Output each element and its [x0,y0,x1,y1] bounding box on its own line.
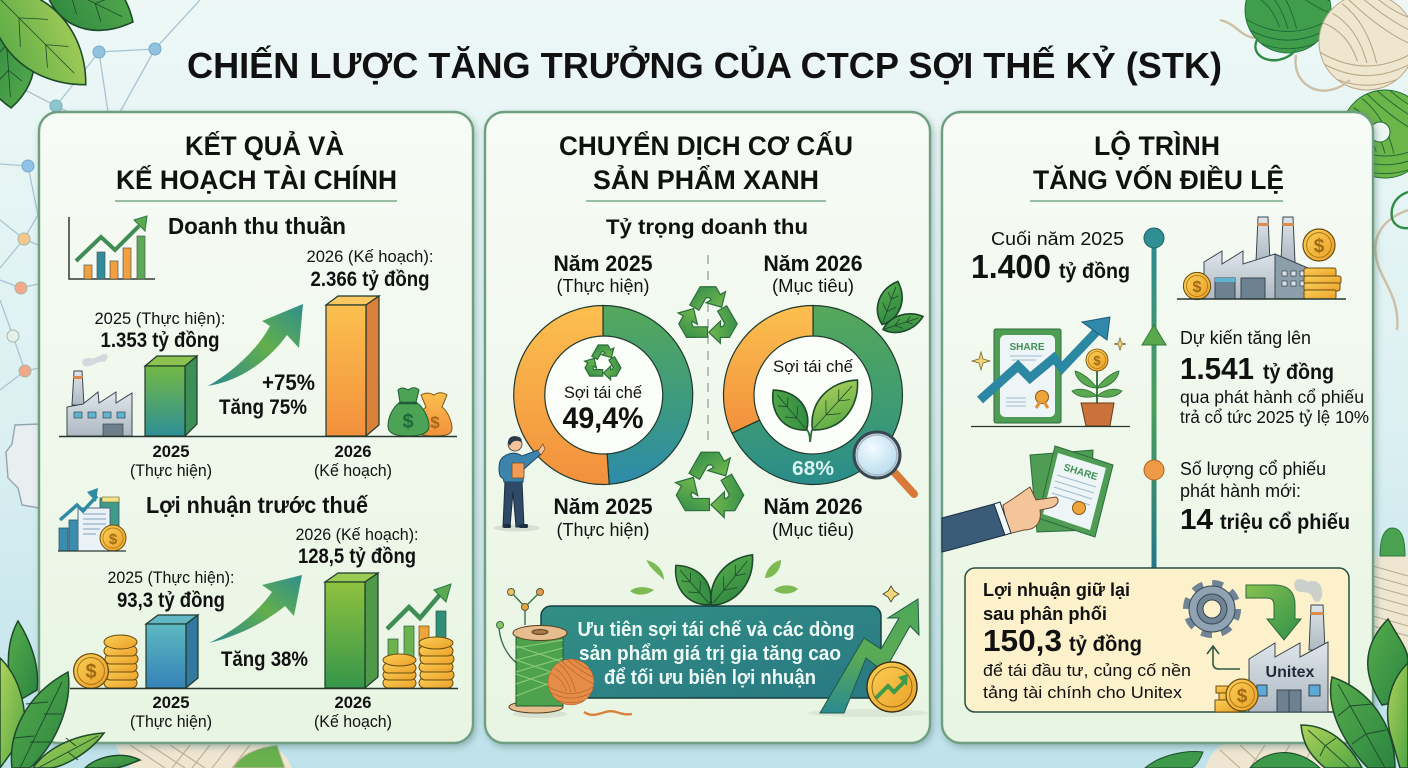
milestone: new shares: Số lượng cổ phiếu [1180,459,1326,479]
icon: magnifier [854,432,914,494]
callout: retained earnings: để tái đầu tư, củng cố nền [983,661,1191,680]
heading: green product shift [559,130,853,201]
milestone: new shares: phát hành mới: [1180,481,1301,501]
milestone: end of 2025 [971,228,1130,285]
banner: priority message: để tối ưu biên lợi nhuận [604,667,816,689]
icon: chart with coins [383,584,454,688]
label: 2025 profit [108,568,234,612]
labels: revenue 2026 axis: (Kế hoạch) [314,461,392,480]
icon: money bags [388,388,452,436]
yarn cones bottom [113,738,1330,768]
icon: hand holding share certificates [942,446,1113,552]
icon: coins: $ [85,661,97,683]
callout: retained earnings: sau phân phối [983,604,1107,624]
yarn balls top right [1220,0,1408,330]
label: 2025 profit: 2025 (Thực hiện): [108,568,234,587]
callout: retained earnings: 150,3 [983,623,1062,658]
icon: share certificate and rising arrow: $ [1093,353,1101,368]
labels: revenue 2025 axis: (Thực hiện) [130,461,212,480]
icon: Unitex factory: $ [1237,686,1248,707]
label: year 2025 bottom [554,494,652,540]
banner: priority message: Ưu tiên sợi tái chế và các dòng [578,619,854,641]
milestone: expected increase [1180,328,1369,427]
icon: revenue chart [69,216,155,279]
label: year 2026 bottom [764,494,862,540]
milestone: expected increase: Dự kiến tăng lên [1180,328,1311,348]
arrow: back to gear [1207,646,1240,669]
icon: profit report: $ [109,531,118,548]
donut chart 2026 [723,306,902,484]
background network of nodes [0,0,200,390]
label: 2025 profit: 93,3 tỷ đồng [117,589,225,612]
callout: retained earnings: tảng tài chính cho Unitex [983,683,1183,702]
labels: revenue 2026 axis: 2026 [334,442,372,461]
panel: charter capital roadmap [942,112,1373,743]
label: year 2026 top: (Mục tiêu) [772,276,854,296]
milestone: new shares: 14 [1180,504,1213,536]
icon: Unitex factory [1215,579,1328,712]
label: year 2026 top: Năm 2026 [764,251,862,276]
milestone: new shares: triệu cổ phiếu [1220,511,1350,534]
icon: factory and coins: $ [1193,279,1202,296]
label: year 2026 bottom: (Mục tiêu) [772,520,854,540]
background gear shape [6,424,39,508]
donut label 2025 [562,383,644,435]
bar: profit 2025 [146,615,198,688]
labels: profit 2026 axis [314,693,392,731]
heading: net revenue: Doanh thu thuần [168,213,346,239]
subheading: revenue share: Tỷ trọng doanh thu [606,216,808,239]
timeline [1142,228,1166,569]
donut label 2025: 49,4% [562,402,644,435]
milestone: end of 2025: Cuối năm 2025 [991,228,1124,249]
milestone: expected increase: 1.541 [1180,351,1254,386]
yarn spool right edge [1373,528,1408,676]
icon: growth arrow and coin [808,586,928,717]
bar: profit 2026 [325,573,378,688]
foreground leaves top left [0,0,145,110]
donut chart 2025 [514,305,693,484]
label: 2026 profit [296,525,418,568]
icon: money bags: $ [430,413,440,432]
banner: priority message [541,606,881,698]
icon: factory and coins [1177,217,1346,300]
milestone: expected increase: tỷ đồng [1263,361,1334,384]
heading: charter capital roadmap [1030,130,1284,201]
heading: financial results [115,129,397,201]
milestone: expected increase: trả cổ tức 2025 tỷ lệ 10% [1180,407,1369,427]
milestone: new shares [1180,459,1350,536]
icon: sprout above banner [630,546,798,614]
heading: pre-tax profit: Lợi nhuận trước thuế [146,492,368,518]
title: CHIẾN LƯỢC TĂNG TRƯỞNG CỦA CTCP SỢI THẾ KỶ (STK) [187,44,1222,86]
label: year 2025 top [554,251,652,296]
label: 2026 revenue: 2026 (Kế hoạch): [306,247,434,266]
panel: financial results [39,112,473,743]
milestone: end of 2025: 1.400 [971,248,1051,285]
growth label profit: Tăng 38% [221,648,308,671]
heading: green product shift: SẢN PHẨM XANH [593,163,819,195]
heading: green product shift: CHUYỂN DỊCH CƠ CẤU [559,130,853,161]
growth label revenue [219,370,315,419]
heading: financial results: KẾT QUẢ VÀ [185,129,344,161]
baseline revenue [59,436,457,438]
icon: recycle top [674,287,742,346]
growth label revenue: Tăng 75% [219,396,307,419]
divider [707,255,709,440]
milestone: expected increase: qua phát hành cổ phiếu [1180,387,1364,407]
icon: spool and yarn [496,588,632,718]
callout: retained earnings: tỷ đồng [1069,633,1142,656]
arrow: into factory [1246,585,1301,640]
label: 2026 profit: 2026 (Kế hoạch): [296,525,418,544]
icon: profit report [58,488,126,551]
labels: profit 2025 axis: (Thực hiện) [130,712,212,731]
banner: priority message: sản phẩm giá trị gia tăng cao [579,643,841,665]
icon: sprout [763,370,869,442]
labels: revenue 2026 axis [314,442,392,480]
labels: profit 2026 axis: (Kế hoạch) [314,712,392,731]
icon: gear [1187,584,1237,634]
donut label 2025: Sợi tái chế [564,383,643,402]
heading: charter capital roadmap: LỘ TRÌNH [1094,130,1220,161]
arrow: revenue growth [208,304,303,386]
label: 2026 revenue: 2.366 tỷ đồng [310,268,430,291]
donut label 2026: Sợi tái chế [773,357,854,376]
icon: recycle bottom [671,452,750,521]
labels: profit 2025 axis: 2025 [152,693,190,712]
icon: hand holding share certificates: SHARE [1062,462,1099,483]
label: year 2025 top: Năm 2025 [554,251,652,276]
label: year 2026 top [764,251,862,296]
label: year 2026 bottom: Năm 2026 [764,494,862,519]
bar: revenue 2026 [326,296,379,436]
callout: retained earnings [965,568,1349,712]
label: year 2025 bottom: (Thực hiện) [556,520,650,540]
label: year 2025 bottom: Năm 2025 [554,494,652,519]
labels: profit 2025 axis [130,693,212,731]
foreground leaves bottom left [0,621,140,768]
icon: recycle small [582,345,624,382]
labels: revenue 2025 axis: 2025 [152,442,190,461]
icon: coins [74,635,138,688]
heading: financial results: KẾ HOẠCH TÀI CHÍNH [116,164,397,195]
labels: revenue 2025 axis [130,442,212,480]
panel: green product shift [485,112,930,743]
growth label revenue: +75% [262,370,315,395]
milestone: end of 2025: tỷ đồng [1059,260,1130,283]
baseline profit [70,688,458,690]
icon: money bags: $ [402,411,414,433]
icon: Unitex factory: Unitex [1266,664,1315,681]
icon: person [494,436,545,532]
heading: charter capital roadmap: TĂNG VỐN ĐIỀU LỆ [1033,163,1284,195]
foreground leaves bottom right [1301,619,1408,768]
label: year 2025 top: (Thực hiện) [556,276,650,296]
labels: profit 2026 axis: 2026 [334,693,372,712]
callout: retained earnings: Lợi nhuận giữ lại [983,580,1130,600]
icon: factory [67,354,132,436]
icon: leaves near donut [871,278,925,337]
label: 2025 revenue: 2025 (Thực hiện): [94,309,226,328]
donut value 2026: 68% [792,458,834,480]
label: 2026 revenue [306,247,434,291]
bar: revenue 2025 [145,356,197,436]
arrow: profit growth [209,575,302,643]
icon: share certificate and rising arrow [971,317,1130,426]
label: 2025 revenue: 1.353 tỷ đồng [100,329,220,352]
label: 2026 profit: 128,5 tỷ đồng [298,545,416,568]
label: 2025 revenue [94,309,226,352]
icon: share certificate and rising arrow: SHARE [1009,342,1045,353]
icon: factory and coins: $ [1314,236,1325,257]
